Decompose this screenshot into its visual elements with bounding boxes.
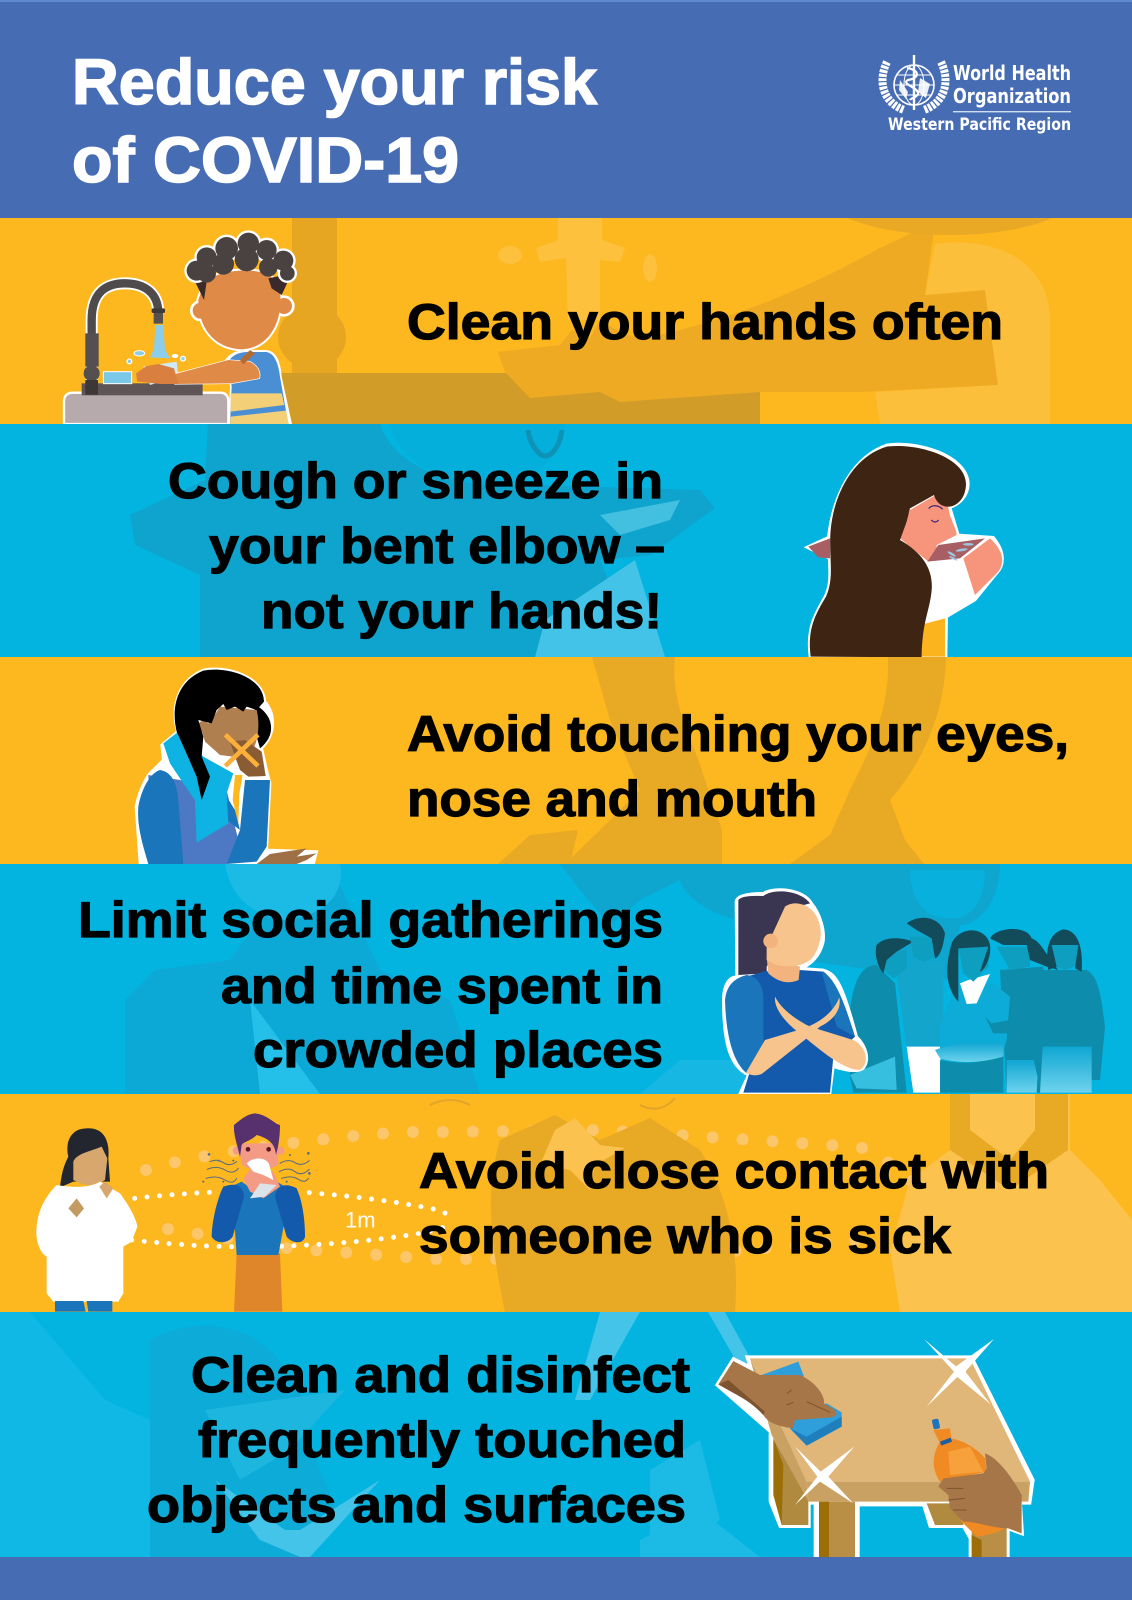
table legs [773, 1438, 1007, 1557]
panel: cough or sneeze [0, 424, 1132, 657]
text: clean and disinfect: Clean and disinfect [191, 1347, 690, 1403]
faucet [84, 283, 165, 395]
shirt [920, 618, 945, 657]
logo wordmark: World Health [953, 61, 1071, 85]
text: limit gatherings: and time spent in [221, 958, 663, 1014]
text: clean and disinfect: objects and surfaces [147, 1477, 686, 1533]
icon: cross over mouth [225, 735, 258, 766]
arm [963, 538, 1002, 595]
text: limit gatherings: crowded places [253, 1022, 663, 1078]
boy curly hair [187, 233, 295, 283]
text: cough or sneeze: Cough or sneeze in [168, 453, 663, 509]
trousers [234, 1253, 282, 1312]
title [72, 46, 597, 196]
logo wordmark: Organization [953, 84, 1071, 108]
outline [717, 1357, 1033, 1557]
hair [175, 670, 264, 800]
icon: WHO emblem [883, 55, 945, 110]
hand with sponge [718, 1361, 836, 1428]
title: Reduce your risk [72, 46, 597, 118]
elbow [927, 538, 985, 562]
text: avoid touching: Avoid touching your eyes, [407, 706, 1069, 762]
WHO logo [883, 55, 1071, 135]
title: of COVID-19 [72, 124, 459, 196]
text: cough or sneeze: not your hands! [261, 583, 662, 639]
text: cough or sneeze [168, 453, 665, 639]
hand with bottle [938, 1453, 1022, 1533]
icon: sick man with tissue [202, 1113, 376, 1312]
face [888, 496, 957, 562]
icon: woman touching face [136, 669, 317, 864]
table top [750, 1358, 1030, 1502]
text: clean and disinfect: frequently touched [198, 1412, 686, 1468]
text: avoid touching [407, 706, 1069, 827]
panel: limit social gatherings [0, 864, 1132, 1094]
header band [0, 0, 1132, 218]
bottle [932, 1418, 1007, 1537]
woman crossing arms [723, 890, 867, 1093]
background: ghost figure [130, 424, 715, 657]
text: limit gatherings [78, 892, 663, 1078]
icon: table being cleaned [717, 1339, 1033, 1557]
icon: boy washing hands [64, 233, 295, 424]
icon: crowd of people [723, 890, 1105, 1093]
text: clean and disinfect [147, 1347, 690, 1533]
hair [810, 446, 966, 657]
text: limit gatherings: Limit social gatherings [78, 892, 663, 948]
panel: clean your hands [0, 218, 1132, 424]
icon: woman in white coat [36, 1128, 137, 1312]
sink [64, 372, 228, 424]
person: hoodie [850, 938, 913, 1093]
background: ghost crowd [125, 864, 1000, 1094]
gap between arm and body [233, 775, 243, 823]
hand [257, 848, 317, 864]
boy head [192, 270, 293, 349]
text: cough or sneeze: your bent elbow – [209, 518, 665, 574]
text: avoid close contact [419, 1143, 1049, 1264]
person: right woman [1028, 929, 1105, 1093]
panel: avoid touching face [0, 657, 1132, 864]
jacket [138, 770, 270, 864]
face and hair [238, 1143, 278, 1170]
footer band [0, 1557, 1132, 1600]
hands and tissue [243, 1165, 280, 1198]
other hand [808, 538, 830, 558]
background: ghost figures and dots [146, 1094, 1132, 1312]
germs [206, 1160, 309, 1182]
text: avoid close contact: someone who is sick [419, 1208, 951, 1264]
logo wordmark [888, 61, 1071, 135]
sparkles [795, 1339, 994, 1505]
sponge [762, 1362, 842, 1446]
background: ghost arms [498, 657, 946, 864]
boy shirt [225, 350, 292, 424]
distance ring dots [132, 1192, 450, 1247]
person: back man [897, 918, 945, 1093]
panel: clean and disinfect [0, 1312, 1132, 1557]
back hair and face [198, 707, 271, 777]
text: avoid touching: nose and mouth [407, 771, 817, 827]
icon: woman coughing into elbow [807, 444, 1002, 657]
boy arm and hands [136, 350, 260, 384]
text: clean your hands: Clean your hands often [407, 294, 1003, 350]
sweater [223, 1182, 297, 1255]
panel: avoid close contact [0, 1094, 1132, 1312]
water [126, 325, 186, 385]
person: back right [990, 929, 1058, 1093]
background: ghost faucet and arm [278, 218, 1052, 424]
1m distance label: 1m [345, 1207, 376, 1232]
person: centre woman [935, 930, 1010, 1093]
outline [807, 444, 1002, 657]
logo wordmark: Western Pacific Region [888, 115, 1071, 135]
background: ghost cleaning figure [0, 1312, 765, 1557]
scarf [163, 732, 233, 843]
outline [136, 669, 317, 864]
text: avoid close contact: Avoid close contact with [419, 1143, 1049, 1199]
